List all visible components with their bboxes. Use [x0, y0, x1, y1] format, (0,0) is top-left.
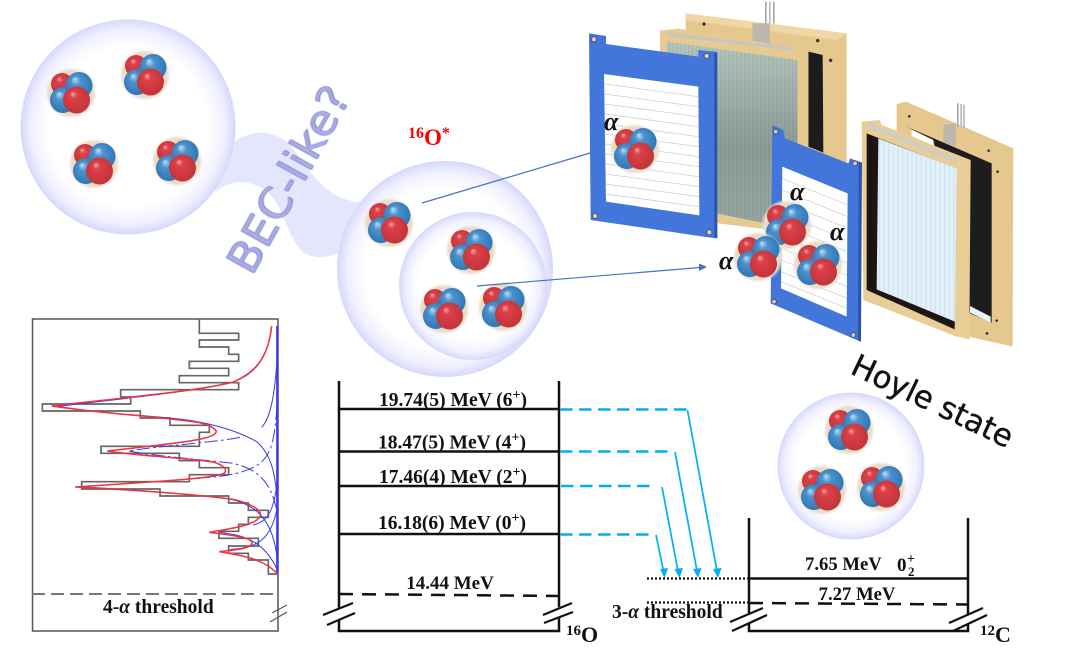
label: 12C: C	[995, 622, 1011, 647]
label: Hoyle state: Hoyle state	[846, 348, 1019, 456]
detector back frame	[686, 2, 847, 163]
label: 4-alpha threshold: 4-α threshold	[103, 597, 214, 618]
connecting neck between bubbles	[215, 133, 360, 257]
level 18.47: 18.47(5) MeV (4	[378, 432, 511, 454]
level 17.46	[339, 465, 559, 488]
level 19.74: +	[512, 388, 520, 403]
panel: 16O level scheme	[323, 381, 598, 647]
level 17.46: +	[512, 465, 520, 480]
alpha cluster	[151, 135, 203, 187]
alpha cluster	[761, 199, 813, 251]
panel: Hoyle state bubble	[778, 392, 924, 540]
label: BEC-like?: BEC-like?	[217, 78, 360, 282]
level 18.47	[339, 430, 559, 454]
detector front frame and wires	[660, 29, 808, 233]
level 18.47: )	[519, 432, 526, 454]
level 7.65: 2	[908, 564, 914, 579]
blue plate 2	[771, 125, 862, 342]
alpha label: α	[790, 177, 805, 206]
label: 16O*: O	[424, 125, 442, 150]
line from 16O cluster to plate 1	[422, 150, 600, 203]
level 7.65: 7.65 MeV	[805, 554, 882, 575]
label: 16O: 16	[566, 623, 582, 639]
blue plate 1	[589, 33, 717, 238]
detector front frame and wires	[862, 120, 971, 339]
alpha label: α	[719, 246, 734, 275]
label: 12C: 12	[980, 623, 995, 639]
level 17.46: 17.46(4) MeV (2	[379, 467, 512, 488]
label: 16O*: *	[442, 125, 450, 142]
level 19.74: )	[520, 390, 527, 411]
level 7.27 threshold: 7.27 MeV	[819, 584, 896, 605]
arrow from 16O sub-bubble to plate 2	[477, 264, 707, 286]
alpha cluster	[855, 461, 907, 513]
panel: left MWDC detector	[589, 2, 847, 238]
decay arrows	[560, 410, 722, 578]
axis break	[270, 605, 287, 622]
histogram	[42, 319, 277, 574]
alpha label: α	[830, 217, 845, 246]
alpha cluster	[792, 239, 844, 291]
axis breaks	[730, 608, 987, 631]
alpha cluster	[796, 464, 848, 516]
level 7.65: +	[907, 552, 915, 567]
alpha cluster	[45, 67, 97, 119]
label: 16O*: 16	[408, 125, 424, 142]
level 16.18	[339, 511, 559, 534]
chart: excitation energy spectrum	[32, 319, 287, 631]
level 14.44 threshold: 14.44 MeV	[406, 573, 494, 594]
level 19.74	[339, 388, 559, 411]
axis breaks	[323, 602, 573, 625]
panel: four-alpha BEC-like bubble	[20, 20, 236, 234]
alpha cluster	[732, 231, 784, 283]
threshold dotted lines	[647, 578, 749, 602]
alpha cluster on plate 1	[609, 123, 661, 175]
label: 3-alpha threshold: 3-α threshold	[612, 602, 723, 623]
alpha cluster	[363, 197, 415, 249]
total fit	[52, 326, 278, 574]
level 19.74: 19.74(5) MeV (6	[379, 390, 512, 411]
level 17.46: )	[520, 467, 527, 488]
alpha cluster	[119, 49, 171, 101]
alpha cluster	[823, 404, 875, 456]
level 16.18: )	[519, 513, 526, 534]
alpha cluster	[477, 281, 529, 333]
panel: right MWDC detector	[771, 102, 1013, 347]
alpha cluster	[418, 283, 470, 335]
alpha cluster	[445, 224, 497, 276]
level 18.47: +	[511, 430, 519, 446]
threshold dashed line	[32, 593, 278, 595]
level 16.18: +	[511, 511, 519, 526]
level 7.65: 0	[897, 555, 906, 576]
fit components	[58, 326, 277, 574]
alpha label: α	[604, 107, 619, 136]
alpha cluster	[68, 138, 120, 190]
level 16.18: 16.18(6) MeV (0	[378, 513, 511, 534]
label: 16O: O	[581, 622, 598, 647]
detector back frame	[897, 102, 1013, 347]
level 7.65	[749, 552, 968, 579]
panel: 16O excited state bubble	[337, 161, 553, 377]
panel: 12C level scheme	[730, 518, 1011, 647]
